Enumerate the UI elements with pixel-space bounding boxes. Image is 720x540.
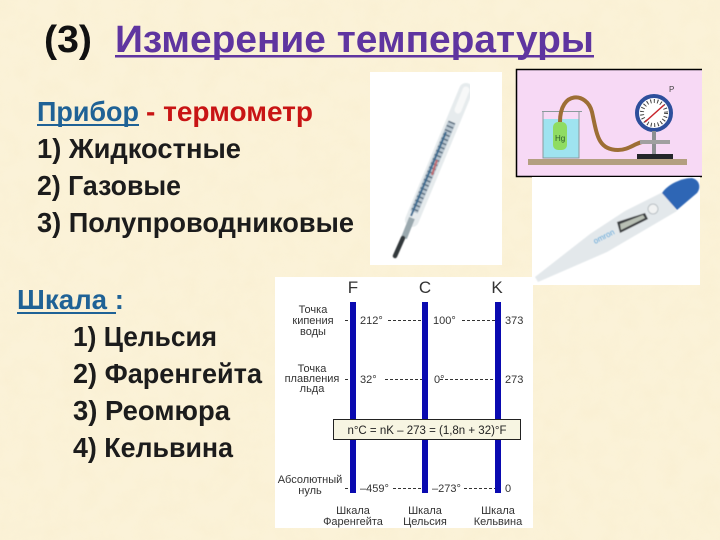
value labels: 0: [505, 483, 511, 495]
row labels: Абсолютный: [278, 474, 342, 486]
row labels: плавления: [285, 373, 339, 385]
scale names: Фаренгейта: [323, 516, 384, 528]
scale names: Шкала: [408, 505, 443, 517]
icon: digital thermometer: [535, 178, 699, 282]
scale names: [323, 505, 523, 528]
icon: pressure gauge: P: [669, 85, 674, 94]
value labels: 100°: [433, 315, 456, 327]
text block: device types: Прибор: [37, 96, 139, 127]
text block: scales: 2) Фаренгейта: [73, 358, 262, 389]
icon: beaker with bulb: Hg: [555, 134, 565, 143]
icon: brown tube: [560, 97, 642, 150]
icon: digital thermometer: omron: [592, 227, 616, 246]
icon: pressure gauge: [637, 85, 674, 159]
row labels: [278, 304, 342, 497]
value labels: 32°: [360, 374, 377, 386]
value labels: 212°: [360, 315, 383, 327]
title: Измерение температуры: [115, 19, 594, 61]
text block: device types: 1) Жидкостные: [37, 133, 241, 164]
value labels: –273°: [432, 483, 461, 495]
row labels: Точка: [298, 363, 327, 375]
table line: [528, 159, 687, 165]
text block: device types: [37, 96, 354, 238]
value labels: –459°: [360, 483, 389, 495]
panel: mercury thermometer photo: [370, 72, 502, 265]
dashed reference lines: [345, 320, 495, 488]
text block: device types: 2) Газовые: [37, 170, 181, 201]
panel: temperature scales chart: [275, 277, 533, 528]
text block: scales: 1) Цельсия: [73, 321, 217, 352]
text block: scales: Шкала :: [17, 284, 124, 315]
scale names: Кельвина: [474, 516, 523, 528]
panel: gas thermometer diagram: [516, 69, 702, 177]
value labels: 0°: [434, 374, 445, 386]
scale headings: K: [491, 278, 503, 297]
title: (3): [44, 19, 92, 61]
icon: glass thermometer: [395, 90, 466, 256]
value labels: 273: [505, 374, 523, 386]
scale names: Шкала: [336, 505, 371, 517]
formula box: [334, 420, 520, 440]
text block: device types: - термометр: [146, 96, 313, 127]
row labels: кипения: [292, 315, 334, 327]
scale headings: F: [348, 278, 358, 297]
value labels: [360, 315, 523, 495]
scale names: Шкала: [481, 505, 516, 517]
scale names: Цельсия: [403, 516, 447, 528]
panel: digital thermometer photo: [532, 177, 700, 285]
row labels: нуль: [298, 485, 322, 497]
row labels: Точка: [299, 304, 328, 316]
text block: scales: 3) Реомюра: [73, 395, 230, 426]
icon: beaker with bulb: [542, 112, 582, 158]
formula box: n°C = nK – 273 = (1,8n + 32)°F: [347, 425, 507, 437]
scale headings: C: [419, 278, 431, 297]
row labels: воды: [300, 326, 326, 338]
value labels: 373: [505, 315, 523, 327]
scale headings: [348, 278, 503, 297]
scale bars: [350, 302, 501, 493]
text block: scales: 4) Кельвина: [73, 432, 233, 463]
text block: scales: [17, 284, 262, 463]
row labels: льда: [300, 383, 325, 395]
text block: device types: 3) Полупроводниковые: [37, 207, 354, 238]
